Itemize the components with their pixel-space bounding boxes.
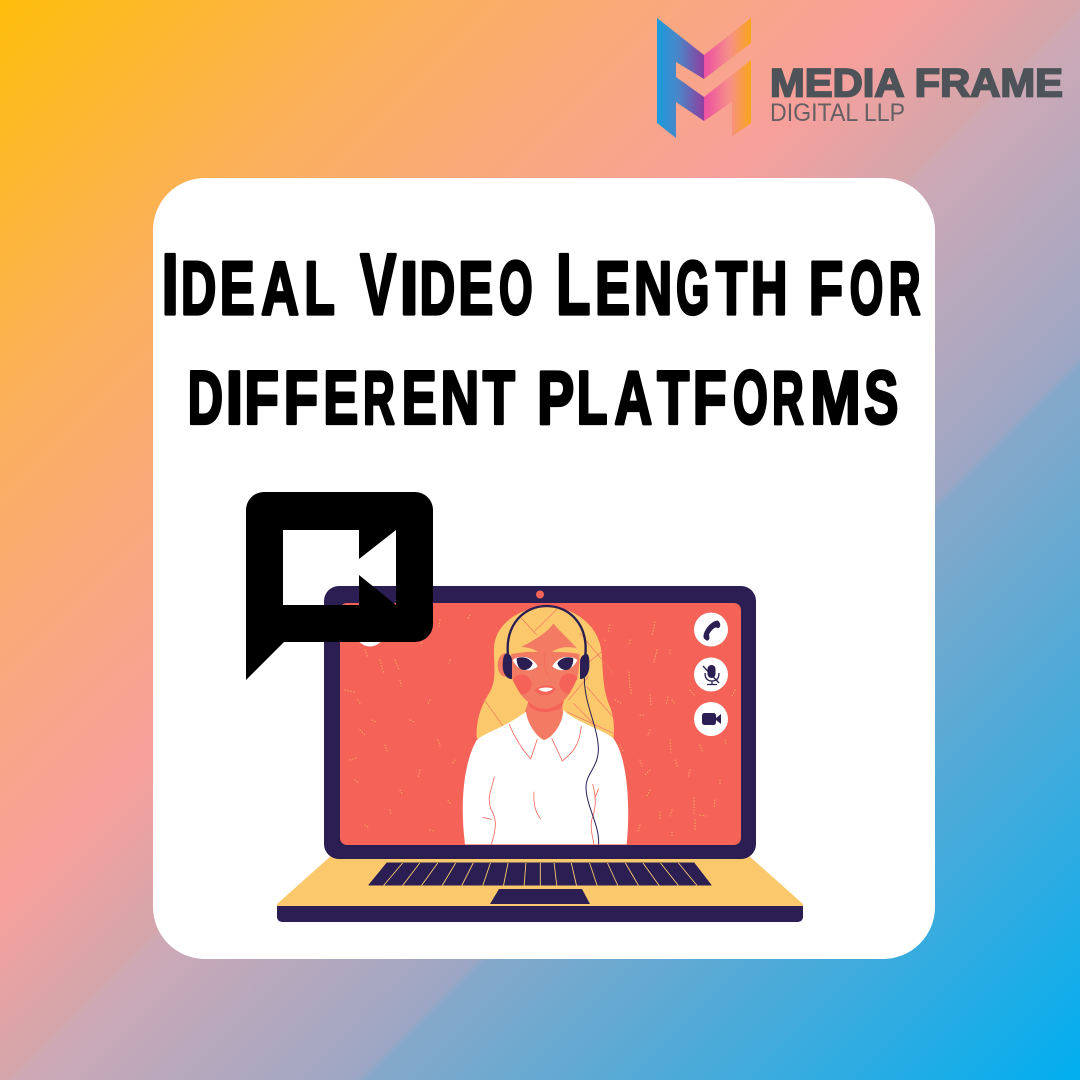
title line 1: O — [499, 246, 533, 330]
title line 2: E — [323, 355, 358, 439]
logo mark — [657, 18, 751, 138]
title line 2: N — [441, 355, 479, 439]
title line 1: A — [261, 246, 299, 330]
icon: video chat speech bubble — [246, 492, 433, 680]
title line 1: I — [162, 237, 179, 333]
touchpad — [490, 889, 590, 904]
eyebrows — [510, 647, 580, 654]
title line 1: R — [889, 246, 920, 330]
title line 1: E — [458, 246, 493, 330]
cheek blush — [512, 674, 579, 694]
phone button — [694, 612, 728, 646]
title line 1: E — [220, 246, 255, 330]
title line 2: F — [244, 355, 279, 439]
title line 1: L — [556, 237, 590, 333]
laptop screen frame — [324, 586, 756, 859]
ear shadow — [498, 653, 512, 677]
white card panel — [153, 178, 935, 959]
eye whites — [513, 657, 577, 670]
title — [162, 237, 920, 439]
shirt — [463, 710, 628, 844]
title line 1: O — [850, 246, 883, 330]
title line 1: H — [751, 246, 787, 330]
person on video call — [463, 606, 628, 844]
title line 1: V — [360, 237, 396, 333]
title line 1: D — [420, 246, 455, 330]
title line 2: P — [537, 355, 574, 439]
headphones band — [508, 606, 586, 655]
title line 2: O — [733, 355, 768, 439]
call control buttons — [694, 612, 728, 736]
hair strand lines — [483, 609, 613, 733]
laptop illustration — [277, 586, 803, 922]
title line 2: F — [284, 355, 318, 439]
headphones right cup — [580, 654, 589, 679]
laptop base — [277, 855, 803, 922]
title line 2: M — [810, 355, 861, 439]
logo: Media Frame Digital LLP — [657, 18, 1063, 138]
title line 1: L — [304, 246, 334, 330]
camera dot — [536, 590, 544, 598]
collar and shirt folds — [483, 724, 599, 844]
mouth — [535, 686, 556, 695]
title line 2: A — [614, 355, 652, 439]
title line 2: S — [864, 355, 898, 439]
title line 2: D — [188, 355, 223, 439]
title line 2: T — [657, 355, 689, 439]
nose — [544, 653, 549, 675]
title line 2: E — [402, 355, 437, 439]
eye irises — [517, 657, 573, 670]
headphone wire — [584, 677, 599, 844]
title line 1: E — [595, 246, 630, 330]
logo name: MEDIA FRAME — [770, 62, 1063, 106]
title line 1: G — [676, 246, 709, 330]
screen speckles — [345, 615, 735, 836]
title line 1: N — [634, 246, 672, 330]
title line 1: T — [716, 246, 747, 330]
title line 1: F — [809, 246, 843, 330]
headphones left cup — [503, 653, 512, 679]
title line 1: D — [181, 246, 216, 330]
title line 1: I — [400, 246, 418, 330]
neck and chest — [523, 702, 563, 740]
chin shadow — [527, 700, 564, 712]
keyboard — [369, 863, 711, 886]
title line 2: I — [226, 355, 243, 439]
title line 2: R — [772, 355, 804, 439]
logo subtitle: DIGITAL LLP — [770, 99, 905, 127]
muted microphone button — [694, 658, 728, 692]
title line 2: F — [693, 355, 727, 439]
video call screen — [340, 603, 741, 845]
title line 2: T — [483, 355, 515, 439]
face — [511, 623, 580, 709]
title line 2: L — [577, 355, 608, 439]
title line 2: R — [363, 355, 395, 439]
video button — [694, 702, 728, 736]
white round button behind bubble — [356, 618, 384, 646]
hair — [477, 607, 614, 740]
